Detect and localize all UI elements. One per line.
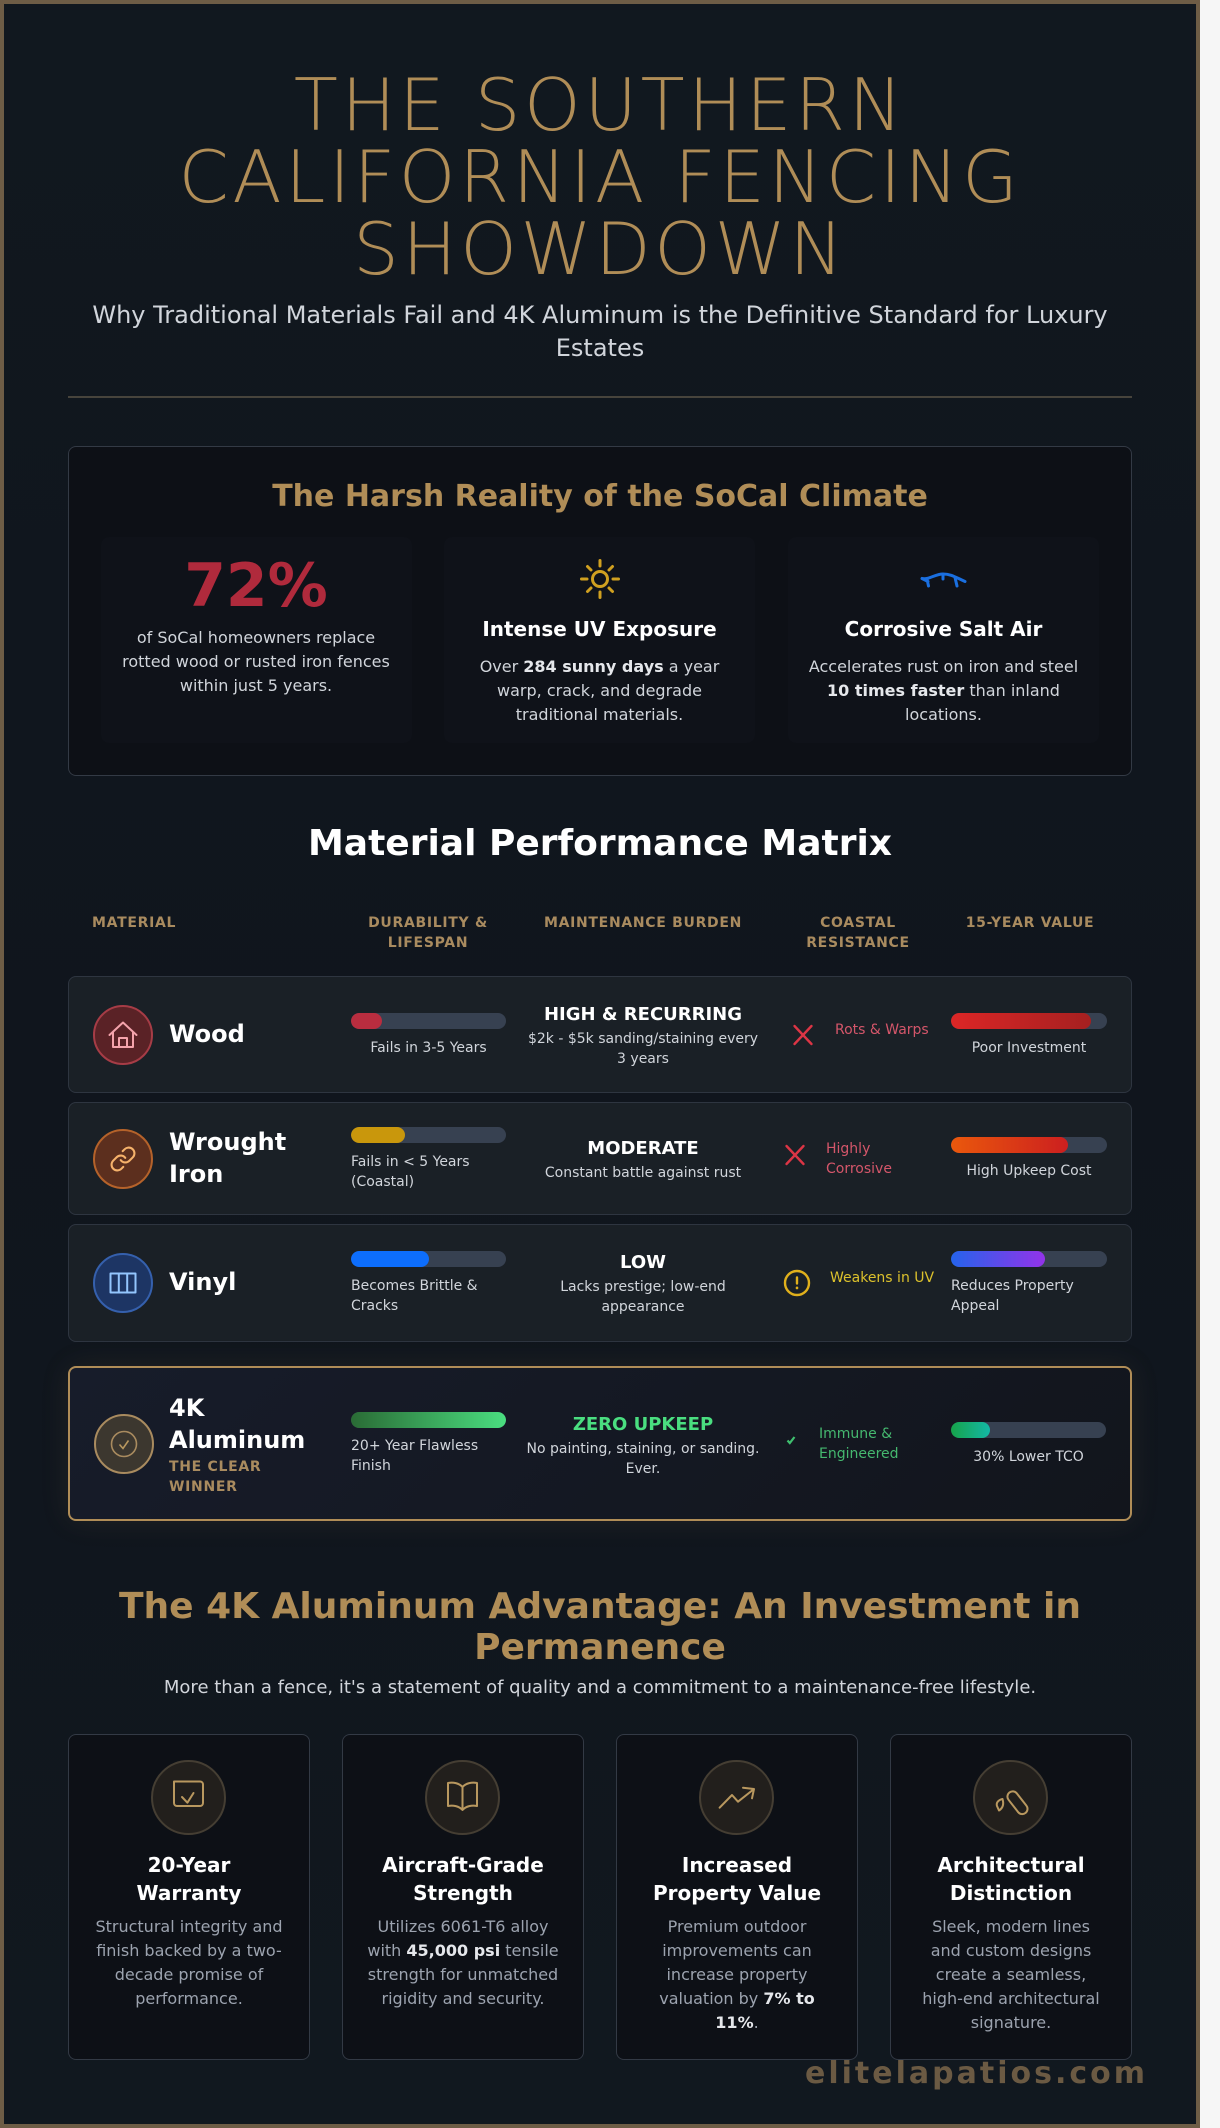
card: salt air <box>788 537 1099 743</box>
subtitle: Estates <box>556 334 644 362</box>
card text: Utilizes 6061-T6 alloy <box>378 1917 548 1936</box>
card text: valuation by 7% to <box>659 1989 815 2008</box>
value label: Appeal <box>951 1298 999 1314</box>
card text: locations. <box>905 705 982 724</box>
durability label: Fails in < 5 Years <box>351 1154 470 1170</box>
maintenance text: No painting, staining, or sanding. <box>527 1441 759 1457</box>
header: coastal: COASTAL <box>820 915 896 931</box>
stat card: 72 percent <box>100 537 412 743</box>
value bar <box>951 1422 1106 1438</box>
header: durability: LIFESPAN <box>388 935 468 951</box>
card text <box>809 657 1078 724</box>
card heading: Strength <box>413 1881 513 1905</box>
durability bar <box>351 1412 506 1428</box>
durability label: 20+ Year Flawless <box>351 1438 478 1454</box>
card: architecture <box>890 1734 1132 2060</box>
icon: chain link <box>93 1129 153 1189</box>
icon: pen and drop <box>973 1760 1048 1834</box>
row: vinyl <box>68 1224 1132 1342</box>
card text: strength for unmatched <box>368 1965 558 1984</box>
icon: wave <box>920 572 966 588</box>
durability label: (Coastal) <box>351 1174 414 1190</box>
card text: Over 284 sunny days a year <box>480 657 719 676</box>
card text: decade promise of <box>115 1965 263 1984</box>
card text: rigidity and security. <box>382 1989 544 2008</box>
durability label: Cracks <box>351 1298 398 1314</box>
stat text <box>122 628 390 695</box>
value bar <box>951 1251 1107 1267</box>
icon: x <box>785 1144 805 1166</box>
card text: Accelerates rust on iron and steel <box>809 657 1078 676</box>
coastal text: Highly <box>826 1141 870 1157</box>
stat text: of SoCal homeowners replace <box>137 628 375 647</box>
material name: Vinyl <box>169 1268 236 1296</box>
card heading: Property Value <box>653 1881 821 1905</box>
material name: Wood <box>169 1020 245 1048</box>
card heading: Corrosive Salt Air <box>845 617 1042 641</box>
watermark: elitelapatios.com <box>805 2056 1148 2091</box>
material name <box>169 1128 286 1188</box>
card text: 11%. <box>715 2013 759 2032</box>
card heading <box>382 1853 544 1905</box>
card text: 10 times faster than inland <box>827 681 1060 700</box>
durability label <box>351 1438 478 1474</box>
card heading: Increased <box>682 1853 792 1877</box>
coastal text: Weakens in UV <box>830 1270 934 1286</box>
row: 4K aluminum winner <box>68 1366 1132 1521</box>
card text: warp, crack, and degrade <box>497 681 702 700</box>
stat text: rotted wood or rusted iron fences <box>122 652 390 671</box>
value label: 30% Lower TCO <box>973 1449 1084 1465</box>
icon: warranty badge <box>151 1760 226 1835</box>
card: UV exposure <box>444 537 755 743</box>
card heading: 20-Year <box>148 1853 230 1877</box>
header: durability: DURABILITY & <box>368 915 488 931</box>
row: wrought iron <box>68 1102 1132 1215</box>
maintenance text: Lacks prestige; low-end <box>560 1279 726 1295</box>
card text: high-end architectural <box>922 1989 1100 2008</box>
advantage heading <box>119 1586 1081 1668</box>
card heading: Warranty <box>137 1881 241 1905</box>
coastal text: Engineered <box>819 1446 899 1462</box>
card heading: Architectural <box>937 1853 1085 1877</box>
durability label: Becomes Brittle & <box>351 1278 478 1294</box>
icon: panel <box>93 1253 153 1313</box>
title: CALIFORNIA FENCING <box>179 135 1021 219</box>
card heading <box>890 1851 1132 1907</box>
material name <box>169 1394 305 1454</box>
maintenance text <box>560 1279 726 1315</box>
card text: create a seamless, <box>936 1965 1086 1984</box>
icon: x <box>793 1024 813 1046</box>
card heading <box>653 1853 821 1905</box>
title: THE SOUTHERN <box>294 63 906 147</box>
durability label: Fails in 3-5 Years <box>370 1040 487 1056</box>
card text <box>367 1917 559 2008</box>
maintenance heading: LOW <box>620 1252 666 1273</box>
card text <box>95 1917 283 2008</box>
card text <box>659 1917 815 2032</box>
durability label: Finish <box>351 1458 391 1474</box>
icon: check circle <box>94 1414 154 1474</box>
card text: and custom designs <box>931 1941 1091 1960</box>
card text: signature. <box>971 2013 1051 2032</box>
durability bar <box>351 1127 506 1143</box>
card heading: Aircraft-Grade <box>382 1853 544 1877</box>
coastal text: Rots & Warps <box>835 1022 929 1038</box>
card text: Structural integrity and <box>95 1917 283 1936</box>
maintenance text: $2k - $5k sanding/staining every <box>528 1031 758 1047</box>
card: property value <box>616 1734 858 2060</box>
maintenance text: Ever. <box>626 1461 660 1477</box>
stat number: 72% <box>184 551 328 621</box>
icon: check <box>786 1436 796 1445</box>
durability bar <box>351 1013 506 1029</box>
durability label <box>351 1154 470 1190</box>
material name: Wrought <box>169 1128 286 1156</box>
value bar <box>951 1137 1107 1153</box>
panel: harsh climate <box>68 446 1132 776</box>
card text: finish backed by a two- <box>96 1941 282 1960</box>
title: SHOWDOWN <box>353 207 847 291</box>
maintenance text: 3 years <box>617 1051 669 1067</box>
matrix heading: Material Performance Matrix <box>308 823 892 864</box>
value label: High Upkeep Cost <box>966 1163 1092 1179</box>
winner tag <box>169 1459 261 1495</box>
maintenance heading: ZERO UPKEEP <box>573 1414 713 1435</box>
card text: Sleek, modern lines <box>932 1917 1090 1936</box>
card text: performance. <box>135 1989 243 2008</box>
winner tag: THE CLEAR <box>169 1459 261 1475</box>
advantage heading: The 4K Aluminum Advantage: An Investment in <box>119 1586 1081 1627</box>
coastal text: Corrosive <box>826 1161 892 1177</box>
maintenance heading: MODERATE <box>587 1138 699 1159</box>
card text: Premium outdoor <box>668 1917 806 1936</box>
card text: with 45,000 psi tensile <box>367 1941 559 1960</box>
card heading <box>137 1853 241 1905</box>
maintenance text <box>528 1031 758 1067</box>
icon: warning <box>784 1270 810 1296</box>
icon: trending up <box>699 1760 774 1835</box>
subtitle <box>92 301 1108 362</box>
title <box>179 63 1021 291</box>
material name: 4K <box>169 1394 204 1422</box>
header: maintenance: MAINTENANCE BURDEN <box>544 915 742 931</box>
durability bar <box>351 1251 506 1267</box>
stat text: within just 5 years. <box>180 676 332 695</box>
maintenance heading: HIGH & RECURRING <box>544 1004 742 1025</box>
header: value: 15-YEAR VALUE <box>966 915 1094 931</box>
winner tag: WINNER <box>169 1479 238 1495</box>
header: coastal: RESISTANCE <box>806 935 910 951</box>
advantage heading: Permanence <box>474 1627 726 1668</box>
coastal text: Immune & <box>819 1426 892 1442</box>
card heading: Intense UV Exposure <box>482 617 717 641</box>
header: coastal <box>806 915 910 951</box>
value label: Poor Investment <box>972 1040 1086 1056</box>
durability label <box>351 1278 478 1314</box>
icon: sun <box>580 559 620 599</box>
material name: Aluminum <box>169 1426 305 1454</box>
climate heading: The Harsh Reality of the SoCal Climate <box>272 479 928 514</box>
value label: Reduces Property <box>951 1278 1074 1294</box>
row: wood <box>68 976 1132 1093</box>
maintenance text <box>527 1441 759 1477</box>
card heading: Distinction <box>950 1881 1072 1905</box>
material name: Iron <box>169 1160 223 1188</box>
maintenance text: Constant battle against rust <box>545 1165 741 1181</box>
header: material: MATERIAL <box>92 915 176 931</box>
card: warranty <box>68 1734 310 2060</box>
card text: improvements can <box>662 1941 812 1960</box>
icon: book <box>425 1760 500 1835</box>
card text: traditional materials. <box>516 705 683 724</box>
card: strength <box>342 1734 584 2060</box>
maintenance text: appearance <box>601 1299 685 1315</box>
card text: increase property <box>666 1965 808 1984</box>
value label <box>951 1278 1074 1314</box>
coastal text <box>826 1141 892 1177</box>
card text <box>480 657 720 724</box>
coastal text <box>819 1426 899 1462</box>
advantage subtitle: More than a fence, it's a statement of quality and a commitment to a maintenance-free lifestyle. <box>164 1677 1036 1698</box>
card text <box>890 1915 1132 2035</box>
subtitle: Why Traditional Materials Fail and 4K Aluminum is the Definitive Standard for Luxury <box>92 301 1108 329</box>
header: durability <box>368 915 488 951</box>
icon: house <box>93 1005 153 1065</box>
value bar <box>951 1013 1107 1029</box>
matrix column headers <box>92 915 1094 951</box>
